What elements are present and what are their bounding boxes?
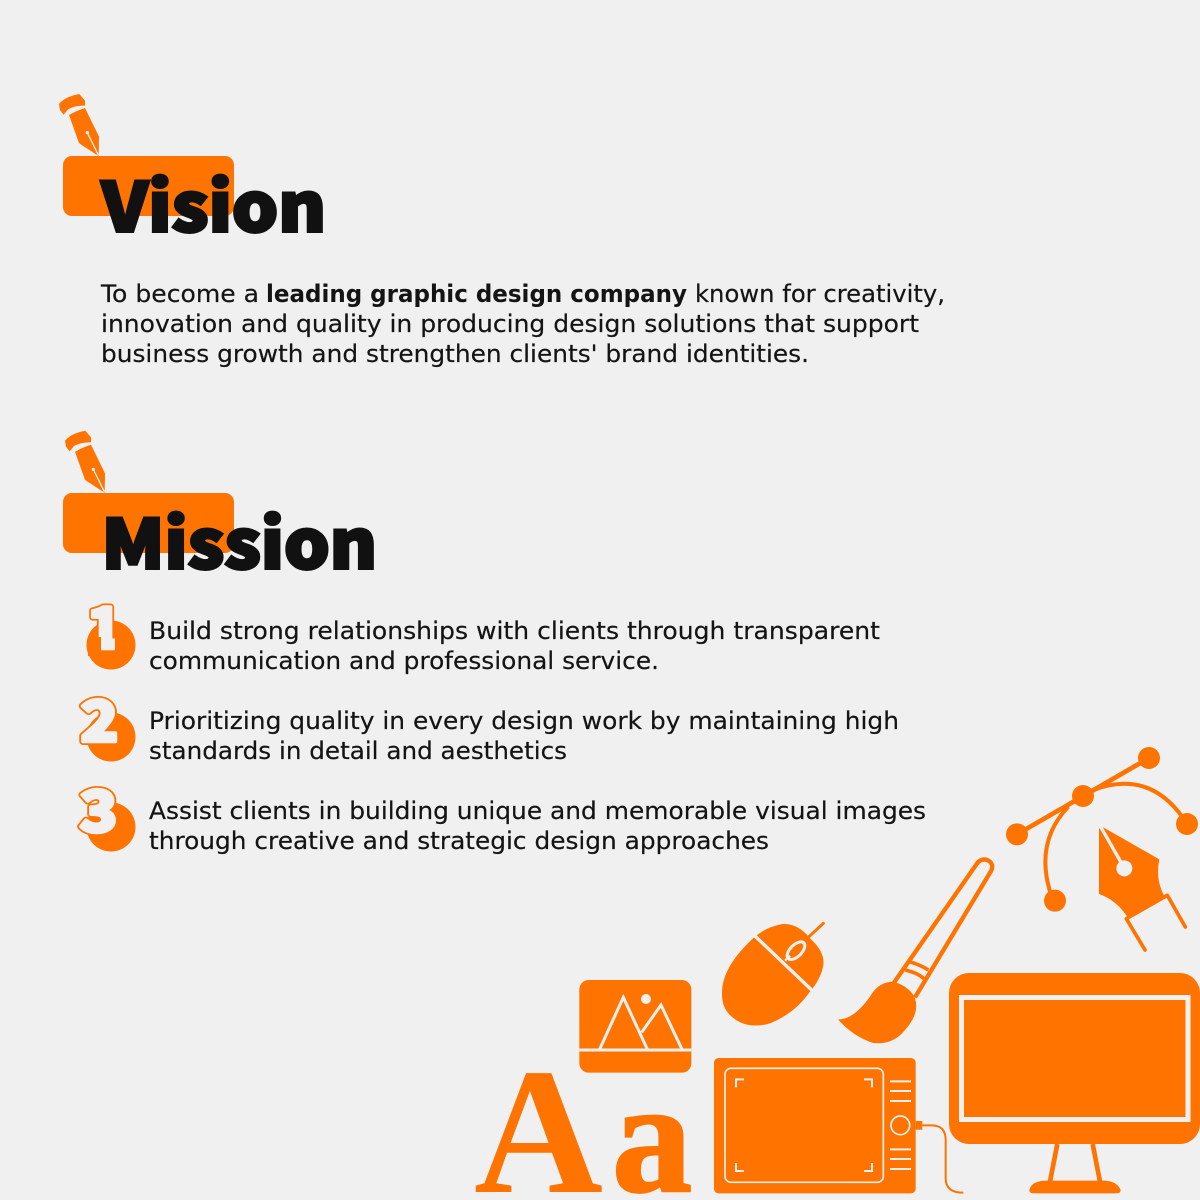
mission text 1: [149, 617, 880, 675]
icon: typography Aa: [474, 1032, 692, 1200]
vision statement: known for creativity,: [695, 280, 945, 308]
icon: drawing tablet: [714, 1058, 963, 1193]
number badge 1: 1: [87, 584, 122, 666]
vision statement: business growth and strengthen clients' brand identities.: [101, 340, 809, 368]
panel: vision: [59, 94, 945, 368]
mission text 2: [149, 707, 899, 765]
icon: bezier curve tool: [1006, 747, 1198, 912]
mission text 1: communication and professional service.: [149, 647, 659, 675]
icon: paint brush: [838, 859, 992, 1043]
icon: vision fountain pen: [59, 94, 99, 156]
vision statement: [100, 280, 945, 368]
icon: mission fountain pen: [65, 431, 105, 493]
heading: vision: Vision: [100, 152, 326, 252]
number badge 2: [80, 676, 136, 762]
mission text 2: standards in detail and aesthetics: [149, 737, 567, 765]
mission text 1: Build strong relationships with clients through transparent: [149, 617, 880, 645]
mission text 3: Assist clients in building unique and memorable visual images: [149, 797, 926, 825]
number badge 1: [86, 584, 136, 670]
number badge 3: [80, 766, 136, 852]
mission heading highlight: [63, 493, 234, 553]
vision heading highlight: [63, 156, 234, 216]
vision statement: leading graphic design company: [266, 280, 687, 308]
number badge 1: 1: [87, 584, 122, 666]
mission text 2: Prioritizing quality in every design work by maintaining high: [149, 707, 899, 735]
mission item 3: [80, 766, 926, 855]
mission text 3: through creative and strategic design approaches: [149, 827, 769, 855]
icon: computer monitor: [949, 973, 1200, 1193]
mission item 2: [80, 676, 899, 765]
mission item 1: [86, 584, 880, 675]
mission text 3: [149, 797, 926, 855]
icon: computer mouse: [722, 923, 823, 1026]
panel: mission: [63, 431, 926, 855]
vision statement: To become a: [100, 280, 259, 308]
number badge 3: 3: [80, 766, 118, 848]
vision statement: innovation and quality in producing design solutions that support: [101, 310, 919, 338]
heading: mission: Mission: [102, 490, 377, 588]
number badge 2: 2: [80, 676, 118, 758]
icon: large pen nib: [1099, 827, 1185, 950]
number badge 3: 3: [80, 766, 118, 848]
number badge 2: 2: [80, 676, 118, 758]
icon: image picture: [579, 980, 691, 1073]
